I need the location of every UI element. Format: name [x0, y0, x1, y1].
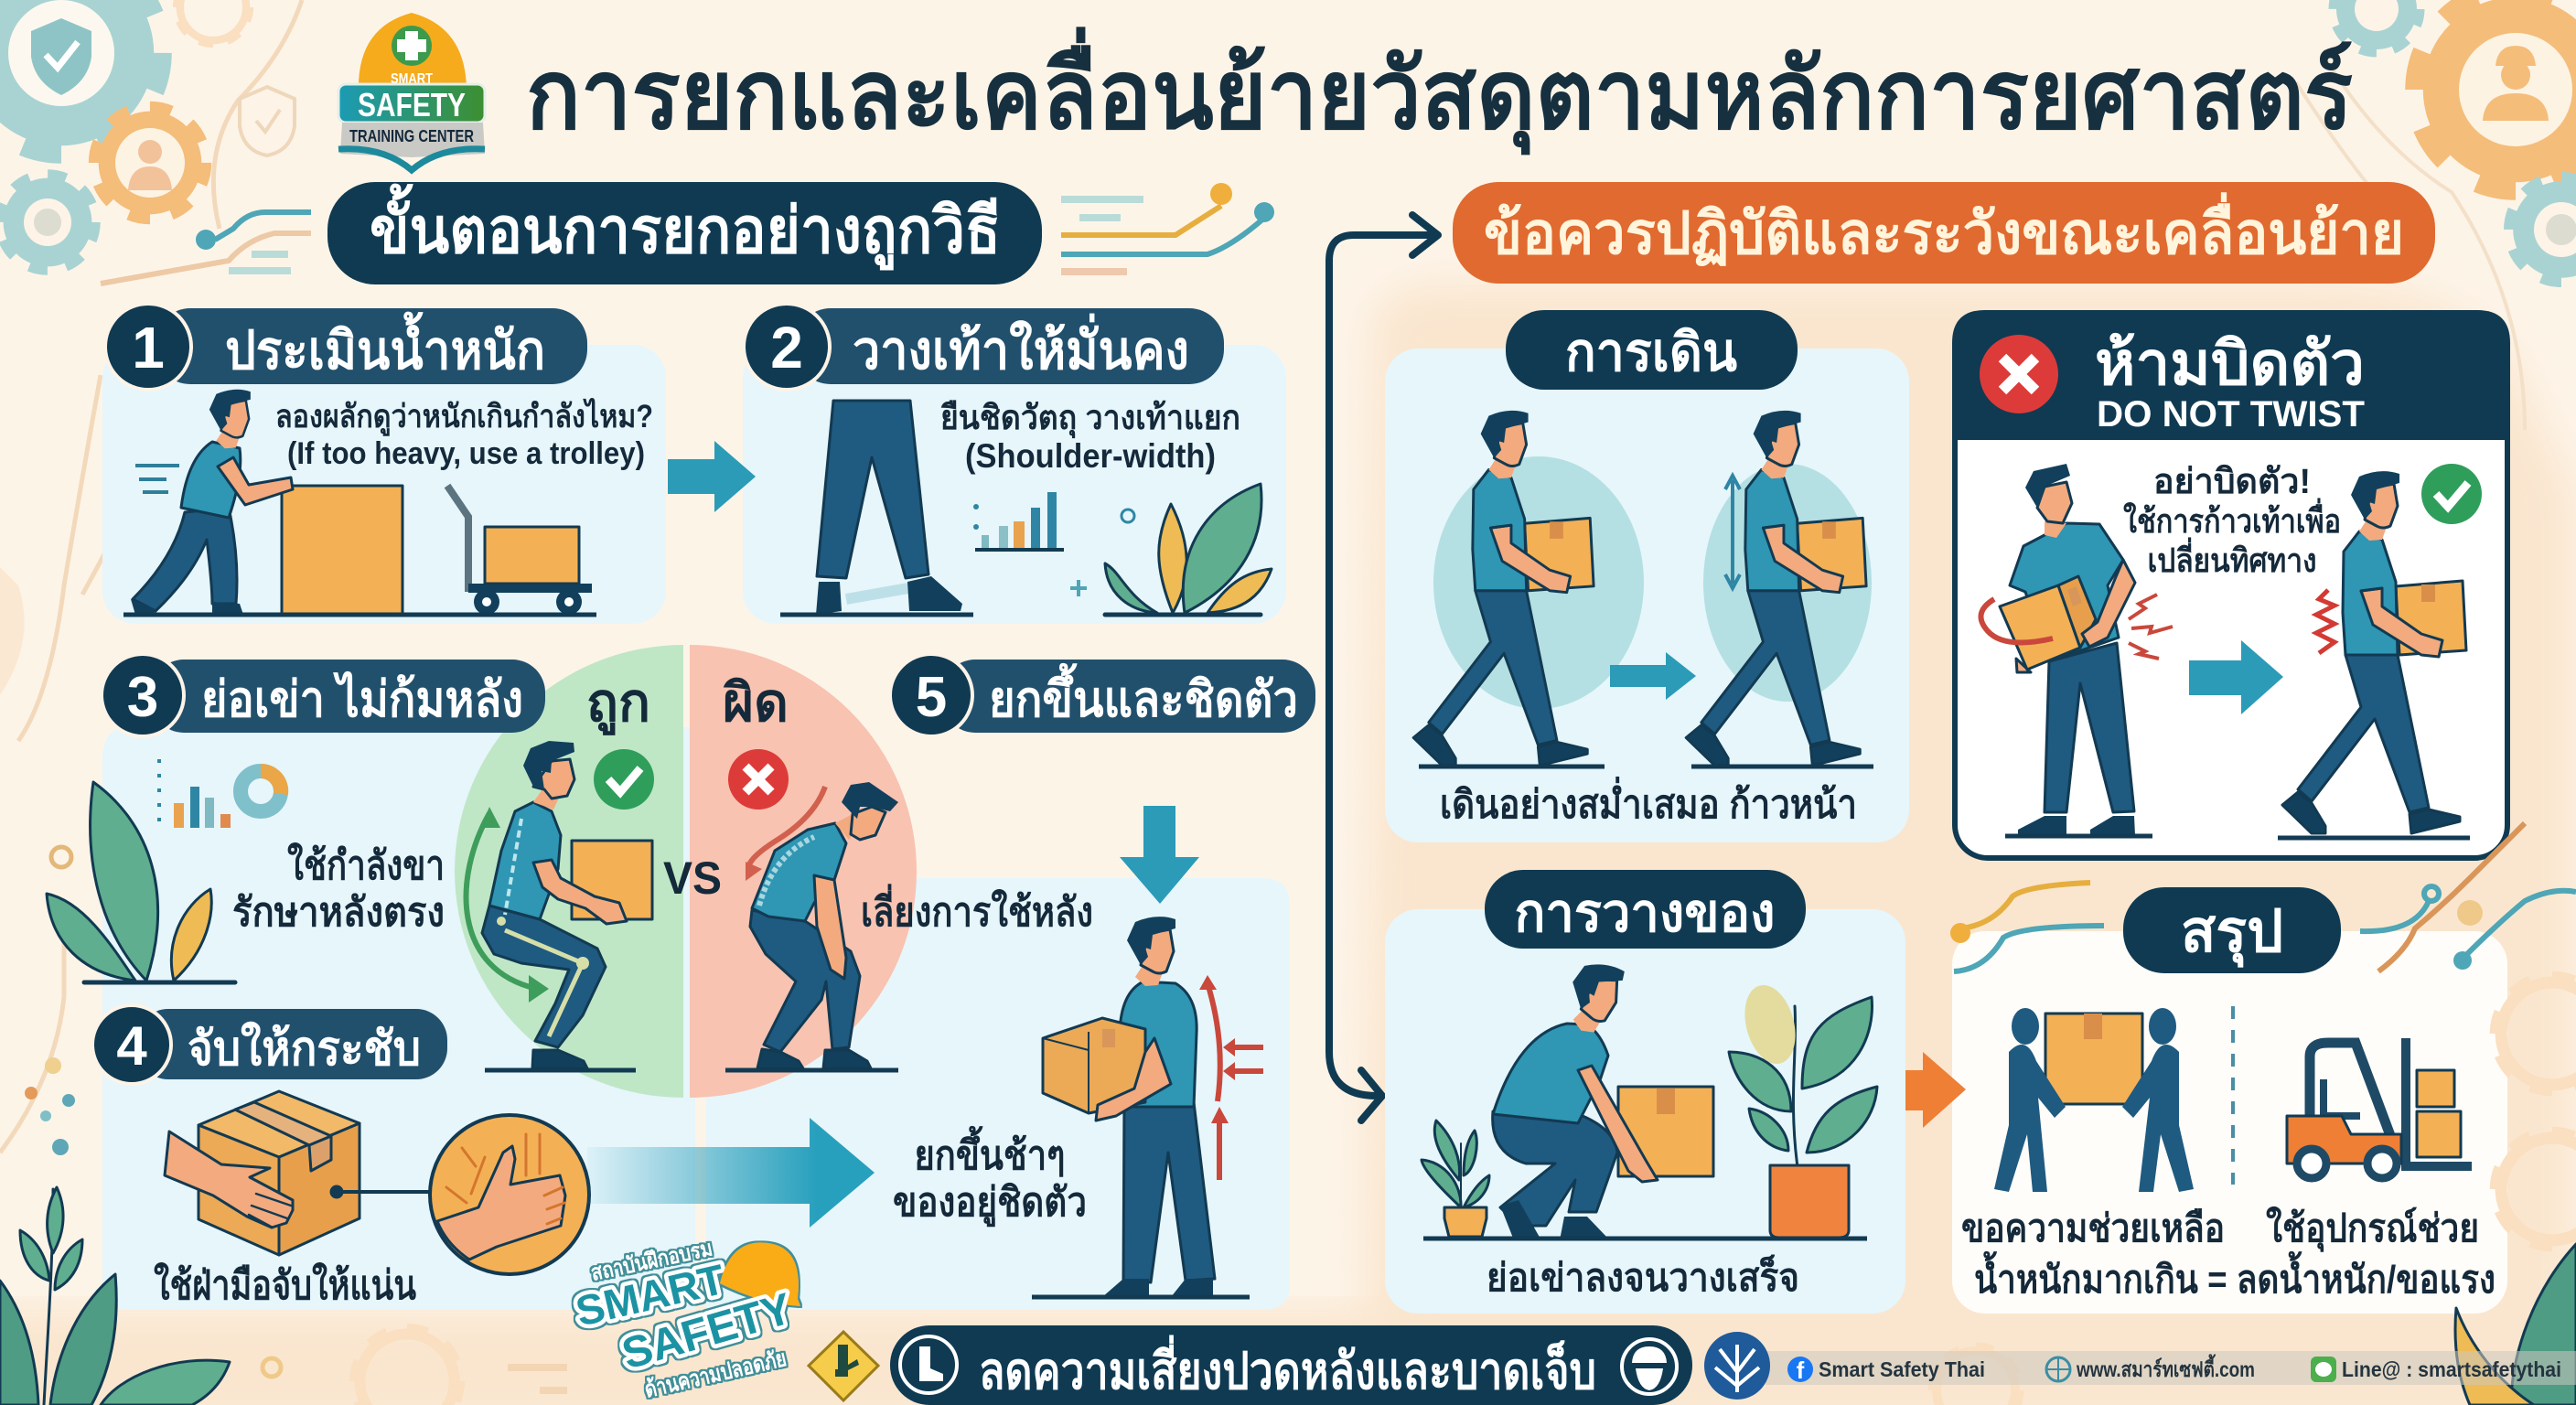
step 5 header — [890, 654, 1315, 736]
badge SMART: SMART — [572, 1255, 729, 1335]
website — [2046, 1354, 2255, 1381]
step 1 description — [275, 397, 653, 471]
panel: walking — [1385, 310, 1909, 842]
foliage bottom left — [0, 1187, 230, 1405]
heading: practices while moving — [1453, 182, 2435, 284]
logo: smart safety training center: SAFETY — [358, 86, 466, 123]
plus mark — [1070, 580, 1087, 596]
decorative gears top left — [0, 0, 295, 269]
illustration: twisting person — [1980, 464, 2173, 836]
arrow: gradient — [587, 1118, 875, 1228]
step 4 header: จับให้กระชับ — [188, 1021, 421, 1076]
icon: hand close-up — [430, 1115, 589, 1274]
logo: smart safety training center: SMART — [391, 71, 433, 87]
small plant — [1422, 1121, 1489, 1237]
label: correct: ถูก — [586, 673, 650, 735]
step 4 header: 4 — [116, 1015, 147, 1077]
arrow: step 1 to step 2 — [668, 441, 756, 512]
icon: organisation emblem — [1704, 1332, 1770, 1400]
foliage bottom right — [2455, 1244, 2576, 1405]
ground lines — [1419, 765, 1873, 768]
icon: helmet — [1622, 1339, 1677, 1394]
summary captions — [1961, 1206, 2496, 1301]
walker left — [1413, 411, 1594, 766]
divider — [2231, 1006, 2235, 1185]
mini bar chart — [973, 492, 1064, 550]
icon: hand on box — [165, 1091, 430, 1255]
badge bottom line: ด้านความปลอดภัย — [642, 1346, 789, 1403]
illustration: pushing box and trolley — [123, 390, 596, 615]
plant — [47, 782, 235, 982]
panel: step 2 stance — [743, 304, 1286, 624]
panel: step 1 assess weight — [102, 304, 666, 624]
illustration: legs apart — [780, 401, 973, 615]
step 1 header: ประเมินน้ำหนัก — [225, 312, 545, 381]
summary captions: ใช้อุปกรณ์ช่วย — [2266, 1206, 2479, 1252]
icon: boot — [900, 1336, 957, 1393]
logo: smart safety training center: TRAINING CENTER — [349, 127, 474, 145]
icon: warning diamond — [809, 1332, 878, 1400]
summary heading — [2123, 887, 2341, 973]
placing heading: การวางของ — [1515, 884, 1775, 943]
decorative gears top right — [2334, 0, 2576, 281]
step 2 description: ยืนชิดวัตถุ วางเท้าแยก — [940, 399, 1240, 439]
step 3 header — [102, 654, 545, 736]
summary captions: ขอความช่วยเหลือ — [1961, 1207, 2225, 1249]
icon: check — [2421, 464, 2482, 524]
arrow: right — [2189, 640, 2283, 714]
walking heading — [1506, 310, 1798, 390]
ground line — [2278, 836, 2470, 840]
step 3 description: รักษาหลังตรง — [232, 890, 445, 935]
line: Line@ : smartsafetythai — [2342, 1357, 2561, 1381]
panel: step 5 lift close — [890, 654, 1315, 1297]
panel: placing down — [1385, 870, 1905, 1314]
highlight shapes — [1433, 456, 1872, 709]
step 1 header — [105, 304, 587, 390]
step 2 header — [744, 304, 1224, 390]
step 3 description — [232, 842, 445, 935]
walking caption: เดินอย่างสม่ำเสมอ ก้าวหน้า — [1440, 777, 1857, 827]
badge: smart safety institute — [572, 1236, 800, 1403]
icon: cross — [1980, 335, 2058, 413]
facebook — [1787, 1357, 1985, 1384]
illustration: crouching person — [1493, 959, 1713, 1240]
step 5 header: ยกขึ้นและชิดตัว — [989, 663, 1298, 727]
heading: lifting steps: ขั้นตอนการยกอย่างถูกวิธี — [370, 183, 1001, 271]
step 5 header: 5 — [916, 666, 947, 729]
panel: steps 3 and 4 background — [102, 727, 695, 1310]
height marker — [1725, 476, 1740, 588]
step 2 description — [940, 399, 1240, 475]
arrow: orange — [1905, 1052, 1966, 1128]
title: การยกและเคลื่อนย้ายวัสดุตามหลักการยศาสตร์ — [526, 27, 2353, 156]
step 2 header: วางเท้าให้มั่นคง — [853, 313, 1189, 381]
decorative gears bottom — [25, 979, 2576, 1405]
twist heading: ห้ามบิดตัว — [2095, 329, 2365, 397]
logo: smart safety training center — [338, 13, 485, 170]
step 4 caption: ใช้ฝ่ามือจับให้แน่น — [154, 1261, 416, 1308]
plant — [1105, 484, 1272, 615]
icon: forklift — [2287, 1038, 2472, 1178]
label: wrong: ผิด — [723, 673, 789, 733]
twist description — [2123, 463, 2341, 579]
vs label: VS — [663, 853, 722, 904]
heading: lifting steps — [327, 182, 1042, 284]
large potted plant — [1729, 980, 1877, 1238]
mini chart and donut — [159, 759, 281, 828]
placing caption: ย่อเข่าลงจนวางเสร็จ — [1487, 1254, 1799, 1299]
placing heading — [1485, 870, 1806, 949]
step 5 description: ยกขึ้นช้าๆ — [915, 1125, 1065, 1178]
twist description: อย่าบิดตัว! — [2153, 463, 2311, 501]
step 2 header: 2 — [770, 315, 803, 381]
decorative circuit lines beside heading — [101, 183, 1274, 284]
pain marks — [2316, 590, 2334, 653]
website: www.สมาร์ทเซฟตี้.com — [2076, 1354, 2255, 1381]
ground line — [1423, 1237, 1867, 1240]
icon: check — [594, 749, 654, 810]
step 2 description: (Shoulder-width) — [965, 437, 1216, 475]
footer contacts — [1704, 1332, 2576, 1400]
panel: step 5 background — [706, 878, 1290, 1310]
illustration: lifting close to body — [1032, 917, 1263, 1297]
summary heading: สรุป — [2181, 898, 2283, 968]
avoid back text: เลี่ยงการใช้หลัง — [861, 884, 1093, 935]
icon: two people carrying — [1994, 1008, 2194, 1192]
step 1 description: ลองผลักดูว่าหนักเกินกำลังไหม? — [275, 397, 653, 436]
arrow: down — [1120, 806, 1199, 904]
walking heading: การเดิน — [1565, 323, 1737, 382]
panel: step 4 grip — [92, 1005, 875, 1308]
helmet — [720, 1242, 800, 1306]
facebook: Smart Safety Thai — [1819, 1357, 1985, 1381]
step 5 description: ของอยู่ชิดตัว — [893, 1180, 1087, 1227]
walker right — [1686, 411, 1866, 766]
twist description: ใช้การก้าวเท้าเพื่อ — [2123, 498, 2341, 540]
badge top line: สถาบันฝึกอบรม — [589, 1236, 714, 1286]
twist heading — [2095, 329, 2365, 434]
walker corrected — [2282, 471, 2466, 833]
panel: do not twist — [1952, 310, 2510, 858]
step 1 header: 1 — [132, 315, 165, 381]
icon: cross — [728, 749, 789, 810]
decorative lines — [1950, 823, 2576, 971]
panel: step 3 squat — [47, 654, 545, 982]
twist description: เปลี่ยนทิศทาง — [2148, 537, 2316, 579]
banner: reduce risk: ลดความเสี่ยงปวดหลังและบาดเจ็บ — [979, 1335, 1596, 1400]
arrow: right — [1610, 652, 1696, 700]
badge SAFETY: SAFETY — [617, 1284, 798, 1379]
step 3 header: 3 — [127, 666, 158, 729]
step 1 description: (If too heavy, use a trolley) — [287, 436, 645, 471]
connector arrows: to right column — [1329, 215, 1438, 1121]
facebook: f — [1797, 1357, 1805, 1384]
twist heading: DO NOT TWIST — [2097, 394, 2365, 434]
summary captions: น้ำหนักมากเกิน = ลดน้ำหนัก/ขอแรง — [1974, 1250, 2496, 1301]
illustration: correct squat — [467, 741, 652, 1070]
illustration: wrong bent back — [725, 782, 898, 1070]
step 3 header: ย่อเข่า ไม่ก้มหลัง — [201, 670, 523, 727]
banner: reduce risk — [890, 1325, 1692, 1405]
comparison circle: correct vs wrong — [455, 645, 917, 1098]
step 5 description — [893, 1125, 1087, 1227]
heading: practices while moving: ข้อควรปฏิบัติและระวังขณะเคลื่อนย้าย — [1484, 192, 2404, 266]
step 3 description: ใช้กำลังขา — [287, 842, 445, 888]
step 4 header — [92, 1005, 447, 1084]
panel: summary — [1950, 823, 2576, 1314]
